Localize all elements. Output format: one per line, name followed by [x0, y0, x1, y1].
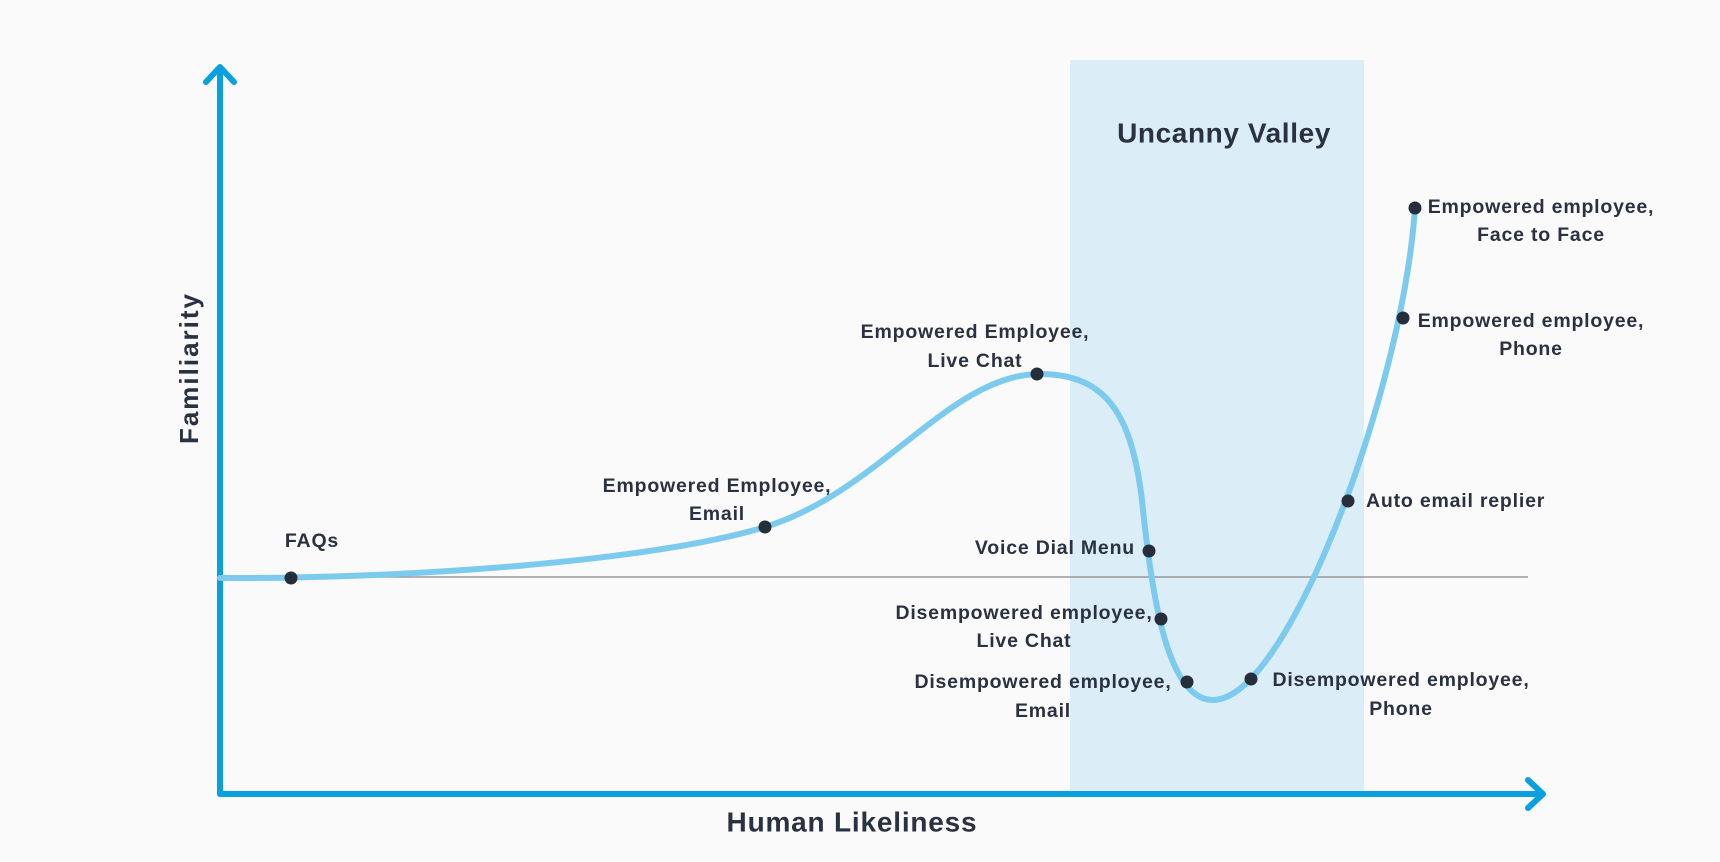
labels: Disempowered employee, — [895, 602, 1153, 624]
labels: Empowered Employee, — [861, 321, 1089, 343]
labels: Empowered employee, — [1418, 310, 1644, 332]
data points — [284, 202, 1422, 688]
x axis label: Human Likeliness: Human Likeliness — [727, 806, 977, 838]
heading: Uncanny Valley: Uncanny Valley — [1117, 118, 1331, 148]
labels: Disempowered employee, — [1272, 669, 1530, 691]
y axis arrow — [206, 67, 234, 794]
labels: Empowered Employee, — [603, 475, 831, 497]
y axis label: Familiarity: Familiarity — [174, 292, 204, 444]
labels: Empowered employee, — [1428, 196, 1654, 218]
labels: Auto email replier — [1366, 490, 1545, 512]
curve — [220, 208, 1415, 700]
labels: Email — [689, 503, 745, 525]
panel: uncanny valley band — [1070, 60, 1364, 791]
labels — [285, 196, 1654, 722]
labels: Disempowered employee, — [914, 671, 1172, 693]
labels: Phone — [1369, 698, 1433, 720]
labels: Phone — [1499, 338, 1563, 360]
x axis arrow — [220, 780, 1543, 808]
labels: Live Chat — [928, 350, 1022, 372]
labels: Face to Face — [1477, 224, 1605, 246]
labels: FAQs — [285, 530, 339, 552]
labels: Live Chat — [977, 630, 1071, 652]
labels: Voice Dial Menu — [975, 537, 1135, 559]
labels: Email — [1015, 700, 1071, 722]
